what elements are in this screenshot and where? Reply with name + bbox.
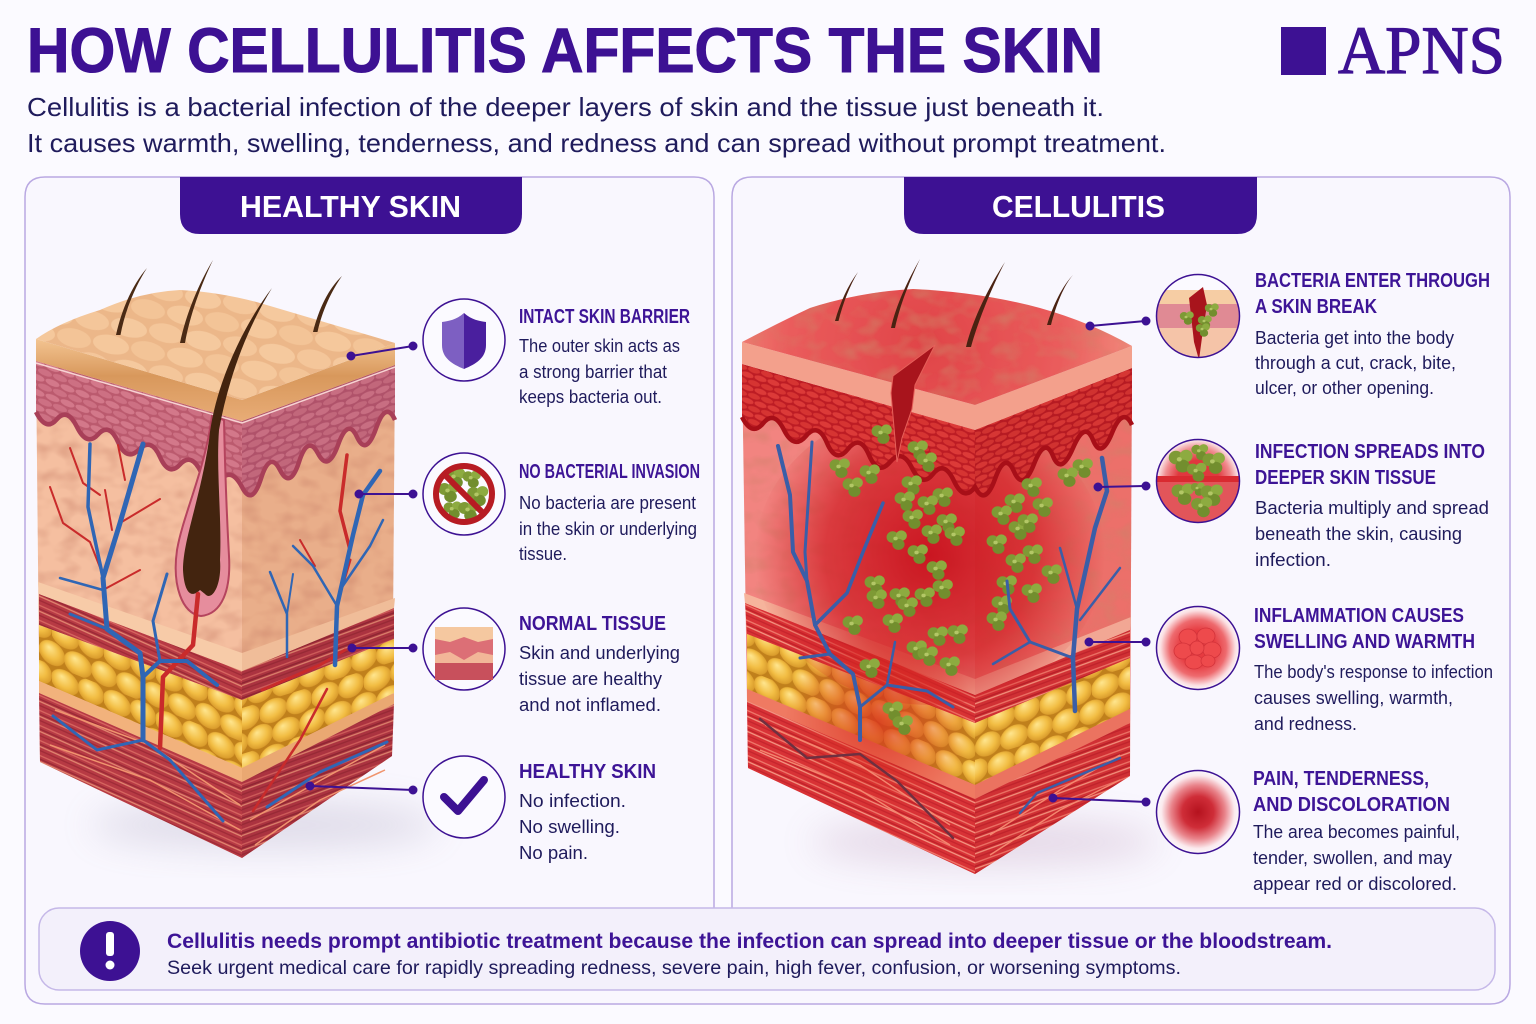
text: intact skin barrier (519, 306, 690, 407)
text: inflammation causes swelling and warmth: The body's response to infection (1254, 661, 1493, 682)
text: pain, tenderness and discoloration: appear red or discolored. (1253, 873, 1457, 894)
hair shaft (183, 288, 272, 596)
heading tab: cellulitis: CELLULITIS (992, 189, 1165, 224)
panel: healthy skin (36, 177, 700, 863)
subtitle: Cellulitis is a bacterial infection of the deeper layers of skin and the tissue just beneath it. (27, 92, 1104, 122)
text: inflammation causes swelling and warmth (1254, 605, 1493, 734)
text: intact skin barrier: keeps bacteria out. (519, 386, 662, 407)
text: pain, tenderness and discoloration: PAIN, TENDERNESS, (1253, 768, 1429, 790)
heading tab: healthy skin (180, 177, 522, 234)
text: pain, tenderness and discoloration: tender, swollen, and may (1253, 847, 1453, 868)
leader lines: healthy skin (306, 342, 416, 794)
callout text: Cellulitis needs prompt antibiotic treatment because the infection can spread into deeper tissue or the bloodstream. (167, 929, 1332, 953)
icon: pain and discoloration (1156, 770, 1240, 854)
text: normal tissue (519, 613, 680, 715)
text: pain, tenderness and discoloration: The area becomes painful, (1253, 821, 1460, 842)
subtitle: It causes warmth, swelling, tenderness, and redness and can spread without prompt treatment. (27, 128, 1166, 158)
panel outline (25, 177, 1510, 1004)
logo: APNS: APNS (1338, 12, 1505, 88)
subtitle (27, 92, 1166, 158)
heading tab: healthy skin: HEALTHY SKIN (240, 189, 461, 224)
text: infection spreads into deeper skin tissue: infection. (1255, 549, 1331, 570)
text: bacteria enter through a skin break: ulcer, or other opening. (1255, 377, 1434, 398)
title: HOW CELLULITIS AFFECTS THE SKIN (27, 16, 1103, 86)
text: pain, tenderness and discoloration: AND DISCOLORATION (1253, 794, 1450, 816)
text: no bacterial invasion: No bacteria are present (519, 492, 696, 513)
text: inflammation causes swelling and warmth: SWELLING AND WARMTH (1254, 631, 1475, 653)
icon: exclamation mark (80, 921, 140, 981)
text: infection spreads into deeper skin tissue (1255, 441, 1489, 570)
text: infection spreads into deeper skin tissue: beneath the skin, causing (1255, 523, 1462, 544)
text: healthy skin: No swelling. (519, 816, 620, 837)
veins (760, 442, 1120, 838)
icon: no bacteria (423, 453, 505, 535)
surface hairs (835, 259, 1073, 347)
icon: inflammation (1156, 606, 1240, 690)
text: bacteria enter through a skin break (1255, 270, 1490, 398)
text: pain, tenderness and discoloration (1253, 768, 1460, 894)
text: intact skin barrier: The outer skin acts as (519, 335, 680, 356)
text: normal tissue: and not inflamed. (519, 694, 661, 715)
text: inflammation causes swelling and warmth: INFLAMMATION CAUSES (1254, 605, 1464, 627)
text: bacteria enter through a skin break: BACTERIA ENTER THROUGH (1255, 270, 1490, 292)
text: intact skin barrier: INTACT SKIN BARRIER (519, 306, 690, 328)
text: normal tissue: tissue are healthy (519, 668, 663, 689)
text: infection spreads into deeper skin tissue: DEEPER SKIN TISSUE (1255, 467, 1436, 489)
text: bacteria enter through a skin break: A SKIN BREAK (1255, 296, 1377, 318)
fibre lines (760, 725, 1120, 855)
text: normal tissue: Skin and underlying (519, 642, 680, 663)
infection zone (755, 405, 1105, 705)
follicle (176, 416, 229, 616)
text: bacteria enter through a skin break: through a cut, crack, bite, (1255, 352, 1456, 373)
heading tab: cellulitis (904, 177, 1257, 234)
skin cross-section: healthy (36, 260, 440, 858)
text: no bacterial invasion: NO BACTERIAL INVASION (519, 461, 700, 483)
text: healthy skin: HEALTHY SKIN (519, 761, 656, 783)
veins (53, 444, 387, 821)
callout text: Seek urgent medical care for rapidly spreading redness, severe pain, high fever, confusion, or worsening symptoms. (167, 957, 1181, 979)
text: no bacterial invasion: tissue. (519, 543, 567, 564)
text: inflammation causes swelling and warmth: and redness. (1254, 713, 1357, 734)
surface hairs (116, 260, 342, 343)
leader lines: cellulitis (1050, 318, 1150, 806)
text: infection spreads into deeper skin tissue: Bacteria multiply and spread (1255, 497, 1489, 518)
callout text (167, 929, 1332, 979)
fibre lines (50, 710, 385, 845)
icon: skin break (1155, 274, 1241, 360)
arteries (50, 445, 350, 811)
icon: shield (423, 299, 505, 381)
text: healthy skin: No infection. (519, 790, 626, 811)
skin cross-section: cellulitis (742, 259, 1160, 874)
text: bacteria enter through a skin break: Bacteria get into the body (1255, 327, 1455, 348)
text: intact skin barrier: a strong barrier that (519, 361, 667, 382)
text: healthy skin (519, 761, 656, 863)
text: normal tissue: NORMAL TISSUE (519, 613, 666, 635)
icon: infection spreading (1155, 440, 1241, 524)
text: inflammation causes swelling and warmth: causes swelling, warmth, (1254, 687, 1453, 708)
skin break wound (891, 345, 935, 462)
text: infection spreads into deeper skin tissue: INFECTION SPREADS INTO (1255, 441, 1485, 463)
text: no bacterial invasion: in the skin or underlying (519, 518, 697, 539)
text: healthy skin: No pain. (519, 842, 588, 863)
bacteria clusters (830, 424, 1093, 735)
text: no bacterial invasion (519, 461, 700, 564)
icon: check mark (423, 756, 505, 838)
panel: cellulitis (742, 177, 1493, 894)
icon: normal tissue (423, 608, 505, 690)
callout: urgent care warning (39, 908, 1495, 990)
